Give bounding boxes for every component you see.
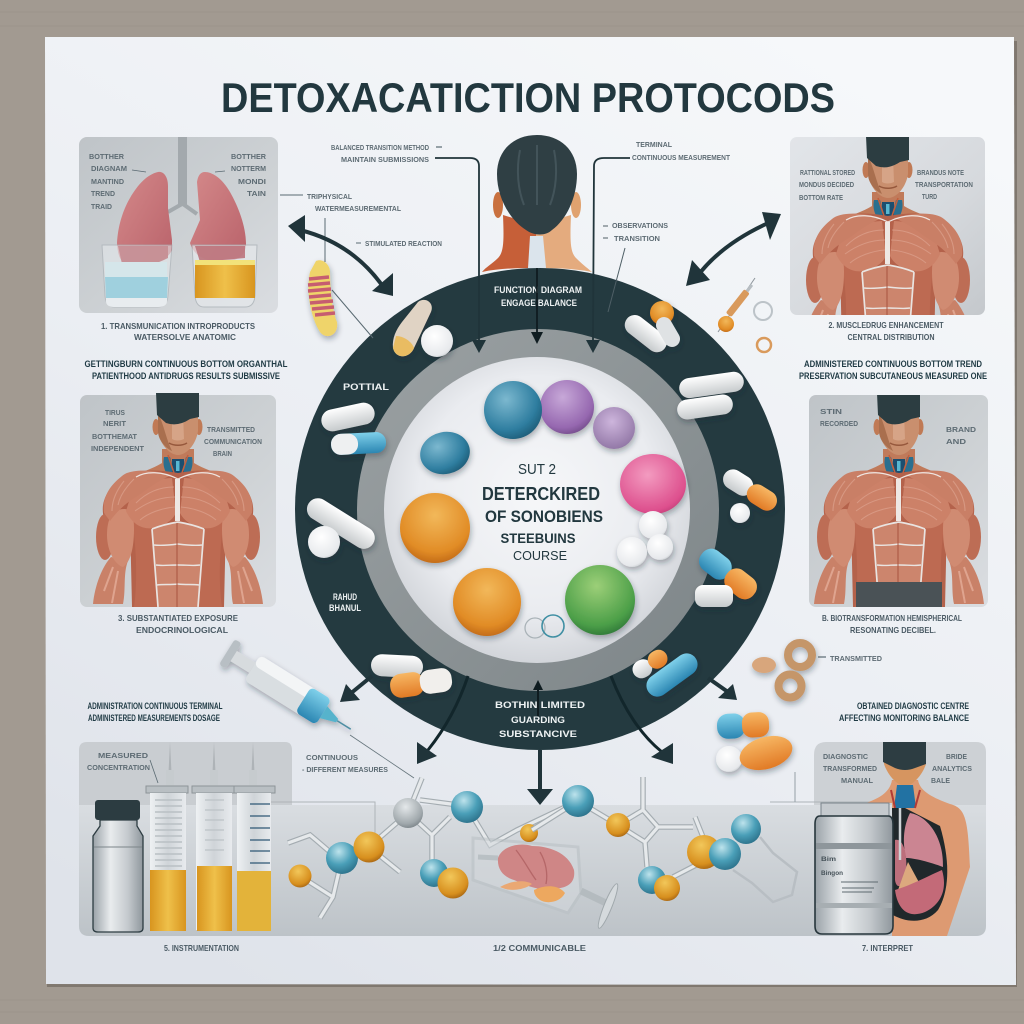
label: center right: OBSERVATIONS bbox=[612, 221, 668, 230]
label: rings: TRANSMITTED bbox=[830, 654, 883, 663]
label: top right bbox=[632, 140, 730, 162]
panel labels: TURD bbox=[922, 192, 937, 201]
ring labels: RAHUD bbox=[333, 592, 357, 602]
heading: left upper bbox=[84, 359, 288, 382]
center text: OF SONOBIENS bbox=[485, 507, 603, 526]
icon: supplement bottle: Bim bbox=[821, 856, 836, 863]
panel labels: BOTTOM RATE bbox=[799, 193, 843, 202]
icon: organ in glass dish bbox=[473, 806, 621, 930]
center pills bbox=[400, 380, 686, 636]
caption: right torso: RESONATING DECIBEL. bbox=[850, 625, 936, 635]
panel labels: BALE bbox=[931, 776, 950, 785]
panel labels: AND bbox=[946, 437, 967, 446]
panel labels: TRANSMITTED bbox=[207, 425, 256, 434]
panel labels bbox=[799, 168, 973, 202]
label: top left: BALANCED TRANSITION METHOD bbox=[331, 143, 429, 152]
lung panel labels: BOTTHER bbox=[89, 152, 125, 161]
center text: DETERCKIRED bbox=[482, 484, 600, 504]
ring pills: upper right bbox=[621, 301, 683, 356]
panel labels: BOTTHEMAT bbox=[92, 432, 137, 441]
arrow: lower right small bbox=[708, 678, 737, 700]
heading: right upper bbox=[799, 359, 987, 382]
central ring diagram bbox=[295, 268, 785, 750]
lung panel labels: TRAID bbox=[91, 202, 113, 211]
arrow: bottom center up bbox=[533, 680, 543, 716]
icon: small rings bbox=[525, 615, 564, 638]
ring pills: right bbox=[695, 466, 781, 607]
molecule atoms bbox=[288, 785, 761, 901]
label: pill callout: WATERMEASUREMENTAL bbox=[315, 204, 401, 213]
caption: top right: 2. MUSCLEDRUG ENHANCEMENT bbox=[828, 320, 944, 330]
icon: top right syringe and rings bbox=[718, 278, 772, 352]
arrow: upper center bbox=[531, 268, 543, 344]
vial labels bbox=[87, 751, 158, 783]
ring pills: left bbox=[303, 401, 387, 558]
ring labels: SUBSTANCIVE bbox=[499, 729, 577, 739]
label: top right: TERMINAL bbox=[636, 140, 672, 149]
panel labels: INDEPENDENT bbox=[91, 444, 144, 453]
panel labels: TRANSFORMED bbox=[823, 764, 878, 773]
bottom captions: 7. INTERPRET bbox=[862, 943, 914, 953]
ring labels: ENGAGE BALANCE bbox=[501, 298, 577, 308]
heading: right upper: ADMINISTERED CONTINUOUS BOTTOM TREND bbox=[804, 359, 982, 370]
ring pills: right upper bbox=[676, 371, 745, 421]
icon: tube 3 bbox=[234, 742, 275, 931]
heading: right lower: AFFECTING MONITORING BALANCE bbox=[839, 713, 969, 724]
arrow: upper center right bbox=[586, 158, 630, 353]
panel labels bbox=[820, 407, 977, 446]
ring pills: lower right bbox=[629, 646, 702, 701]
arrow: top right double bbox=[686, 212, 781, 286]
caption: lungs: WATERSOLVE ANATOMIC bbox=[134, 332, 236, 342]
icon: tube 1 bbox=[146, 742, 188, 931]
bottom captions: 1/2 COMMUNICABLE bbox=[493, 943, 586, 953]
icon: lower right pills bbox=[716, 712, 796, 776]
label: top left: MAINTAIN SUBMISSIONS bbox=[341, 155, 429, 164]
ring: inner light bbox=[384, 357, 690, 663]
panel labels: ANALYTICS bbox=[932, 764, 972, 773]
ring: outer dark bbox=[295, 268, 785, 750]
panel: lungs with beakers bbox=[79, 137, 278, 313]
bottom band bbox=[79, 735, 986, 936]
panel: muscular torso top right bbox=[790, 137, 985, 315]
caption: left torso: 3. SUBSTANTIATED EXPOSURE bbox=[118, 613, 238, 623]
lung panel labels: DIAGNAM bbox=[91, 164, 127, 173]
ring labels: POTTIAL bbox=[343, 382, 390, 392]
vial labels: MEASURED bbox=[98, 751, 149, 760]
molecule bonds bbox=[288, 777, 703, 918]
label: center right bbox=[603, 221, 668, 312]
panel labels: MONDUS DECIDED bbox=[799, 180, 854, 189]
panel: organs and bottle bbox=[770, 742, 986, 936]
arrow: upper center left bbox=[435, 158, 486, 353]
heading: left lower bbox=[88, 701, 223, 724]
bottom captions: 5. INSTRUMENTATION bbox=[164, 943, 239, 953]
center text: SUT 2 bbox=[518, 461, 556, 478]
label: top left bbox=[331, 143, 442, 164]
center text: STEEBUINS bbox=[500, 530, 576, 546]
panel labels: NERIT bbox=[103, 419, 126, 428]
caption: top right: CENTRAL DISTRIBUTION bbox=[848, 332, 934, 342]
ring labels bbox=[329, 285, 586, 739]
icon: supplement bottle: Bingon bbox=[821, 870, 843, 877]
heading: right lower: OBTAINED DIAGNOSTIC CENTRE bbox=[857, 701, 969, 712]
panel labels bbox=[823, 752, 972, 785]
torso figure bbox=[93, 393, 263, 607]
caption: right torso bbox=[822, 613, 962, 635]
panel labels: DIAGNOSTIC bbox=[823, 752, 869, 761]
panel labels: TIRUS bbox=[105, 408, 125, 417]
ring labels: FUNCTION DIAGRAM bbox=[494, 285, 582, 295]
icon: supplement bottle bbox=[815, 803, 893, 934]
center text: COURSE bbox=[513, 548, 567, 563]
icon: trachea bbox=[168, 137, 197, 214]
torso figure bbox=[806, 137, 970, 315]
panel: vials bbox=[79, 742, 375, 932]
label: pill callout bbox=[280, 192, 442, 338]
caption: left torso: ENDOCRINOLOGICAL bbox=[136, 625, 228, 635]
lung panel labels: MONDI bbox=[238, 177, 266, 186]
caption: lungs bbox=[101, 321, 255, 342]
ring pills: lower left bbox=[370, 654, 453, 699]
lung panel labels bbox=[89, 152, 267, 211]
shorts bbox=[856, 582, 942, 607]
label: pill callout: STIMULATED REACTION bbox=[365, 239, 442, 248]
label: center right: TRANSITION bbox=[614, 234, 660, 243]
top labels bbox=[280, 140, 730, 338]
arrow: lower left bbox=[417, 676, 468, 764]
icon: tube 2 bbox=[192, 742, 234, 931]
lung panel labels: TREND bbox=[91, 189, 116, 198]
icon: right lung bbox=[190, 172, 246, 262]
panel: muscular torso left bbox=[80, 393, 276, 607]
label: top right: CONTINUOUS MEASUREMENT bbox=[632, 153, 730, 162]
panel labels: BRIDE bbox=[946, 752, 967, 761]
ring pills: upper left bbox=[393, 300, 453, 357]
panel labels: TRANSPORTATION bbox=[915, 180, 973, 189]
heading: left lower: ADMINISTERED MEASUREMENTS DOSAGE bbox=[88, 713, 220, 724]
panel labels: BRANDUS NOTE bbox=[917, 168, 964, 177]
panel labels: BRAND bbox=[946, 425, 977, 434]
ring labels: GUARDING bbox=[511, 715, 565, 725]
arrow: lower right bbox=[611, 676, 673, 764]
panel labels: RECORDED bbox=[820, 419, 859, 428]
panel labels: STIN bbox=[820, 407, 842, 416]
vial labels: CONCENTRATION bbox=[87, 763, 150, 772]
heading: left upper: PATIENTHOOD ANTIDRUGS RESULTS SUBMISSIVE bbox=[92, 371, 280, 382]
caption: left torso bbox=[118, 613, 238, 635]
center text bbox=[482, 461, 603, 563]
icon: brown rings bbox=[752, 643, 812, 698]
icon: pink-wrapped yellow pill bbox=[308, 260, 337, 336]
heading: left upper: GETTINGBURN CONTINUOUS BOTTOM ORGANTHAL bbox=[84, 359, 288, 370]
icon: bottle bbox=[93, 800, 143, 932]
arrow: top left double bbox=[288, 215, 393, 296]
panel: muscular torso right bbox=[809, 393, 988, 607]
title: DETOXACATICTION PROTOCODS bbox=[221, 74, 835, 121]
label: vial side: - DIFFERENT MEASURES bbox=[302, 765, 388, 774]
panel labels bbox=[91, 408, 262, 458]
icon: left beaker bbox=[102, 245, 172, 307]
bottom captions bbox=[164, 943, 914, 953]
icon: right beaker bbox=[192, 245, 257, 307]
lung panel labels: BOTTHER bbox=[231, 152, 267, 161]
caption: right torso: B. BIOTRANSFORMATION HEMISPHERICAL bbox=[822, 613, 962, 623]
lung panel labels: NOTTERM bbox=[231, 164, 266, 173]
panel labels: RATTIONAL STORED bbox=[800, 168, 855, 177]
lung panel labels: TAIN bbox=[247, 189, 266, 198]
molecule diagram bbox=[288, 777, 797, 930]
label: pill callout: TRIPHYSICAL bbox=[307, 192, 352, 201]
panel labels: MANUAL bbox=[841, 776, 873, 785]
panel labels: BRAIN bbox=[213, 449, 232, 458]
lung panel labels: MANTIND bbox=[91, 177, 125, 186]
ring labels: BHANUL bbox=[329, 603, 361, 613]
icon: anatomical torso bbox=[866, 742, 970, 936]
ring labels: BOTHIN LIMITED bbox=[495, 700, 586, 710]
label: vial side bbox=[302, 753, 388, 774]
ring: middle gray bbox=[357, 329, 719, 691]
panel labels: COMMUNICATION bbox=[204, 437, 262, 446]
heading: left lower: ADMINISTRATION CONTINUOUS TERMINAL bbox=[88, 701, 223, 712]
faint ring structure bbox=[733, 837, 797, 902]
label: vial side: CONTINUOUS bbox=[306, 753, 358, 762]
arrow: lower left small bbox=[340, 676, 372, 702]
caption: top right bbox=[828, 320, 944, 342]
arrow: bottom center down bbox=[527, 750, 553, 805]
heading: right lower bbox=[839, 701, 969, 724]
icon: large syringe bbox=[219, 639, 359, 742]
icon: left lung bbox=[117, 172, 172, 267]
head, back view bbox=[482, 135, 592, 272]
caption: lungs: 1. TRANSMUNICATION INTROPRODUCTS bbox=[101, 321, 255, 331]
torso figure bbox=[814, 393, 984, 607]
